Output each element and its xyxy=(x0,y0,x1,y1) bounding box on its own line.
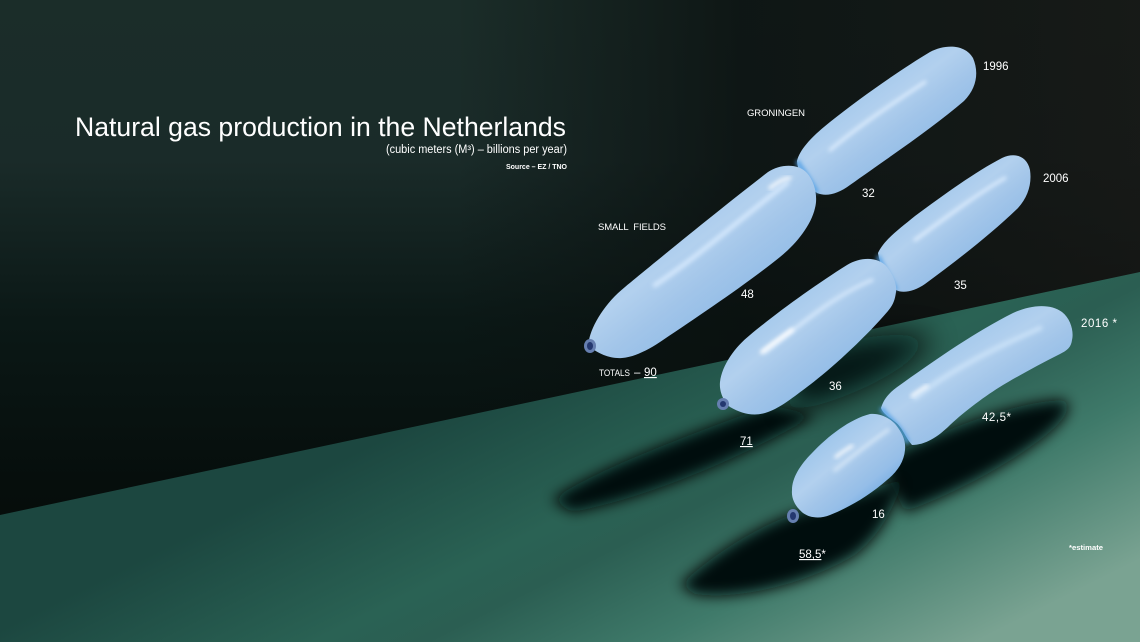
value 32: 32 xyxy=(862,188,875,200)
balloon: small fields 2006 xyxy=(720,259,896,414)
source: Source – EZ / TNO xyxy=(506,164,568,171)
total 90 xyxy=(599,367,657,379)
footnote estimate: *estimate xyxy=(1069,545,1103,552)
balloon: knot 2006 xyxy=(717,398,729,410)
total 90: TOTALS xyxy=(599,368,630,378)
balloon: small fields 2016 xyxy=(792,414,905,517)
year label 2016: 2016 * xyxy=(1081,318,1118,330)
balloon: Groningen 2006 xyxy=(878,155,1030,292)
subtitle: (cubic meters (M³) – billions per year) xyxy=(386,144,567,156)
balloon: Groningen 1996 xyxy=(797,47,976,195)
balloon: knot 1996 xyxy=(584,339,596,353)
value 48: 48 xyxy=(741,289,754,301)
value 36: 36 xyxy=(829,381,842,393)
total 90: – xyxy=(634,367,641,379)
year label 1996: 1996 xyxy=(983,61,1009,73)
total 90: 90 xyxy=(644,367,657,379)
floor surface xyxy=(0,272,1140,642)
title: Natural gas production in the Netherlands xyxy=(75,112,566,142)
total 71: 71 xyxy=(740,436,753,448)
balloon shadows on floor xyxy=(552,335,1068,595)
balloon: knot 2016 xyxy=(787,509,799,523)
value 35: 35 xyxy=(954,280,967,292)
value 42,5: 42,5* xyxy=(982,412,1012,424)
series label Groningen: GRONINGEN xyxy=(747,108,805,119)
total 58,5: 58,5* xyxy=(799,549,826,561)
balloon: Groningen 2016 xyxy=(881,306,1073,445)
value 16: 16 xyxy=(872,509,885,521)
balloon: small fields 1996 xyxy=(589,166,816,358)
year label 2006: 2006 xyxy=(1043,173,1069,185)
series label small fields: SMALL FIELDS xyxy=(598,222,666,233)
